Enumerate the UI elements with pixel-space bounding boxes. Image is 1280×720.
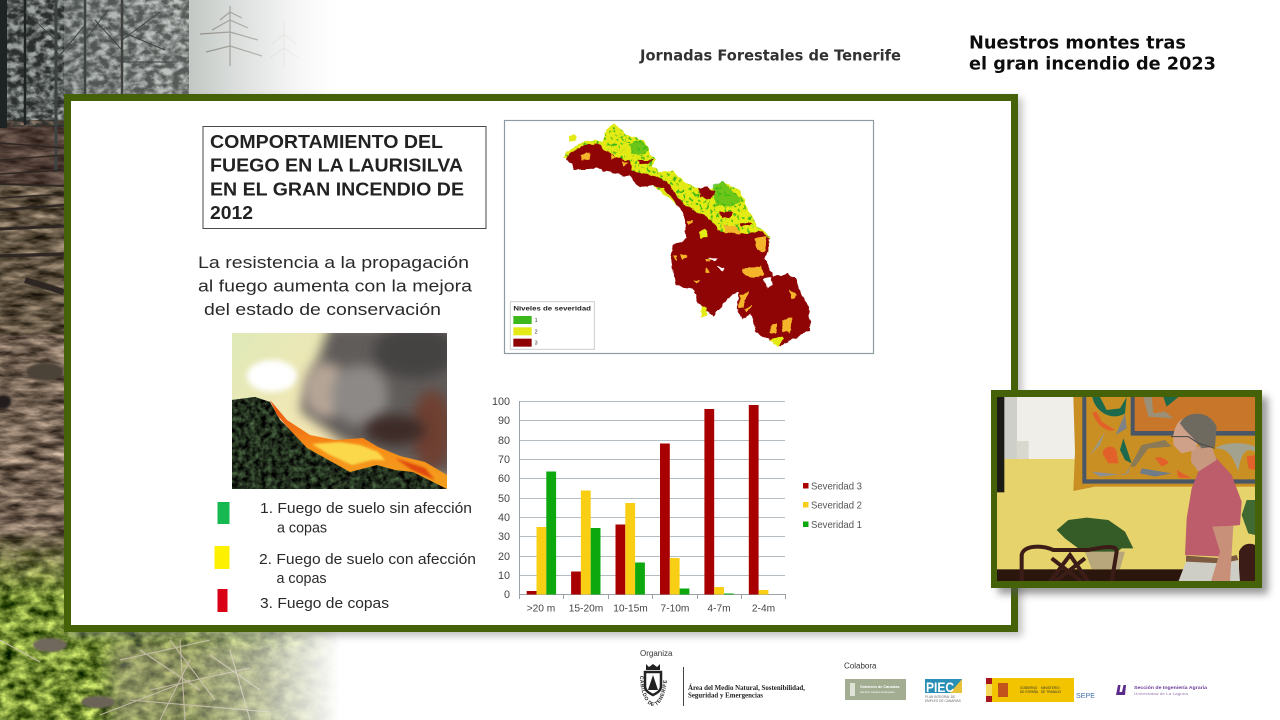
legend item 1: ground fire without crown damage: 1. Fuego de suelo sin afección: [260, 501, 472, 517]
y axis labels: 30: [498, 531, 510, 543]
x axis labels: >20 m: [527, 604, 555, 614]
legend item 2: ground fire with crown damage: a copas: [276, 571, 327, 587]
series: severidad 1: [546, 472, 734, 594]
intro text: del estado de conservación: [204, 300, 441, 319]
x axis labels: 2-4m: [752, 604, 775, 614]
map legend: 3: [535, 341, 538, 347]
background: forest photograph on the left: [0, 0, 336, 720]
slide heading box: 2012: [210, 203, 253, 223]
y axis labels: 70: [498, 454, 510, 466]
slide heading box: [203, 126, 486, 228]
legend item 2: ground fire with crown damage: 2. Fuego de suelo con afección: [259, 552, 476, 568]
header: talk title: Nuestros montes tras: [969, 32, 1186, 54]
x axis labels: 15-20m: [569, 604, 603, 614]
legend item 1: ground fire without crown damage: [218, 501, 472, 536]
y axis labels: 60: [498, 473, 510, 485]
chart grid and axis: [519, 401, 786, 599]
y axis labels: 10: [498, 570, 510, 582]
speaker video inset: [991, 390, 1268, 594]
y axis labels: 40: [498, 512, 510, 524]
logo: Cabildo de Tenerife crest: CABILDO DE TENERIFE: [640, 676, 667, 706]
footer: organiser: [640, 649, 805, 706]
logo: PIEC: PIEC: [926, 679, 954, 695]
chart legend: Severidad 3: [811, 482, 862, 492]
x axis labels: 4-7m: [707, 604, 731, 614]
footer: collaborators: [844, 662, 1208, 703]
photo: forest crown fire: [232, 333, 447, 489]
logo: PIEC: EMPLEO DE CANARIAS: [925, 699, 961, 703]
logo: PIEC: [925, 679, 962, 703]
intro text: al fuego aumenta con la mejora: [198, 276, 473, 296]
logo: PIEC: PLAN INTEGRAL DE: [925, 695, 955, 699]
map legend: [510, 302, 594, 349]
chart legend: Severidad 1: [811, 520, 862, 531]
logo: Sección de Ingeniería Agraria: Universidad de La Laguna: [1134, 691, 1189, 696]
series: severidad 2: [536, 490, 768, 594]
x axis labels: [527, 604, 775, 614]
logo: Gobierno de España / SEPE: MINISTERIO: [1041, 686, 1060, 690]
y axis labels: 90: [498, 415, 510, 427]
y axis labels: [492, 396, 510, 601]
legend item 3: crown fire: [218, 589, 389, 612]
footer: organiser: Seguridad y Emergencias: [688, 690, 763, 700]
chart legend: Severidad 2: [811, 500, 862, 512]
logo: Gobierno de España / SEPE: DE TRABAJO: [1041, 690, 1061, 694]
logo: Gobierno de Canarias: Servicio Canario de Empleo: [860, 690, 895, 694]
y axis labels: 50: [498, 493, 510, 505]
slide heading box: EN EL GRAN INCENDIO DE: [210, 180, 464, 200]
chart legend: [803, 482, 862, 531]
logo: Sección de Ingeniería Agraria: Sección de Ingeniería Agraria: [1134, 685, 1208, 690]
map legend: Niveles de severidad: [513, 306, 591, 313]
footer: collaborators: Colabora: [844, 662, 877, 670]
footer: organiser: Organiza: [640, 649, 673, 658]
y axis labels: 100: [492, 396, 510, 408]
header: talk title: el gran incendio de 2023: [969, 54, 1216, 74]
logo: Gobierno de Canarias: [845, 679, 906, 700]
bar chart: severity by height class: [492, 396, 862, 614]
logo: Gobierno de España / SEPE: GOBIERNO: [1020, 686, 1038, 690]
logo: Gobierno de España / SEPE: SEPE: [1076, 693, 1095, 700]
y axis labels: 20: [498, 551, 510, 563]
legend item 2: ground fire with crown damage: [214, 546, 476, 587]
y axis labels: 80: [498, 435, 510, 447]
logo: Gobierno de España / SEPE: [986, 678, 1095, 702]
footer: organiser: Área del Medio Natural, Sostenibilidad,: [688, 682, 805, 692]
slide panel: [64, 94, 1022, 636]
series: severidad 3: [527, 405, 759, 594]
header: talk title: [969, 32, 1216, 74]
map: severity areas: [562, 123, 810, 347]
header: event name: Jornadas Forestales de Tenerife: [639, 46, 901, 64]
logo: Gobierno de España / SEPE: DE ESPAÑA: [1020, 689, 1039, 694]
slide heading box: COMPORTAMIENTO DEL: [210, 132, 443, 152]
logo: Sección de Ingeniería Agraria: [1116, 685, 1208, 696]
map legend: 2: [535, 329, 538, 335]
fire type legend: [214, 501, 476, 612]
y axis labels: 0: [504, 589, 510, 601]
severity map: [504, 120, 874, 354]
logo: Cabildo de Tenerife crest: [640, 664, 667, 706]
legend item 1: ground fire without crown damage: a copas: [277, 520, 327, 536]
map legend: 1: [535, 318, 538, 324]
x axis labels: 7-10m: [661, 604, 689, 614]
legend item 3: crown fire: 3. Fuego de copas: [260, 596, 389, 612]
intro text: La resistencia a la propagación: [198, 253, 469, 272]
slide heading box: FUEGO EN LA LAURISILVA: [210, 156, 463, 176]
logo: Gobierno de Canarias: Gobierno de Canarias: [860, 685, 899, 689]
intro text: [198, 253, 473, 319]
x axis labels: 10-15m: [613, 604, 648, 614]
